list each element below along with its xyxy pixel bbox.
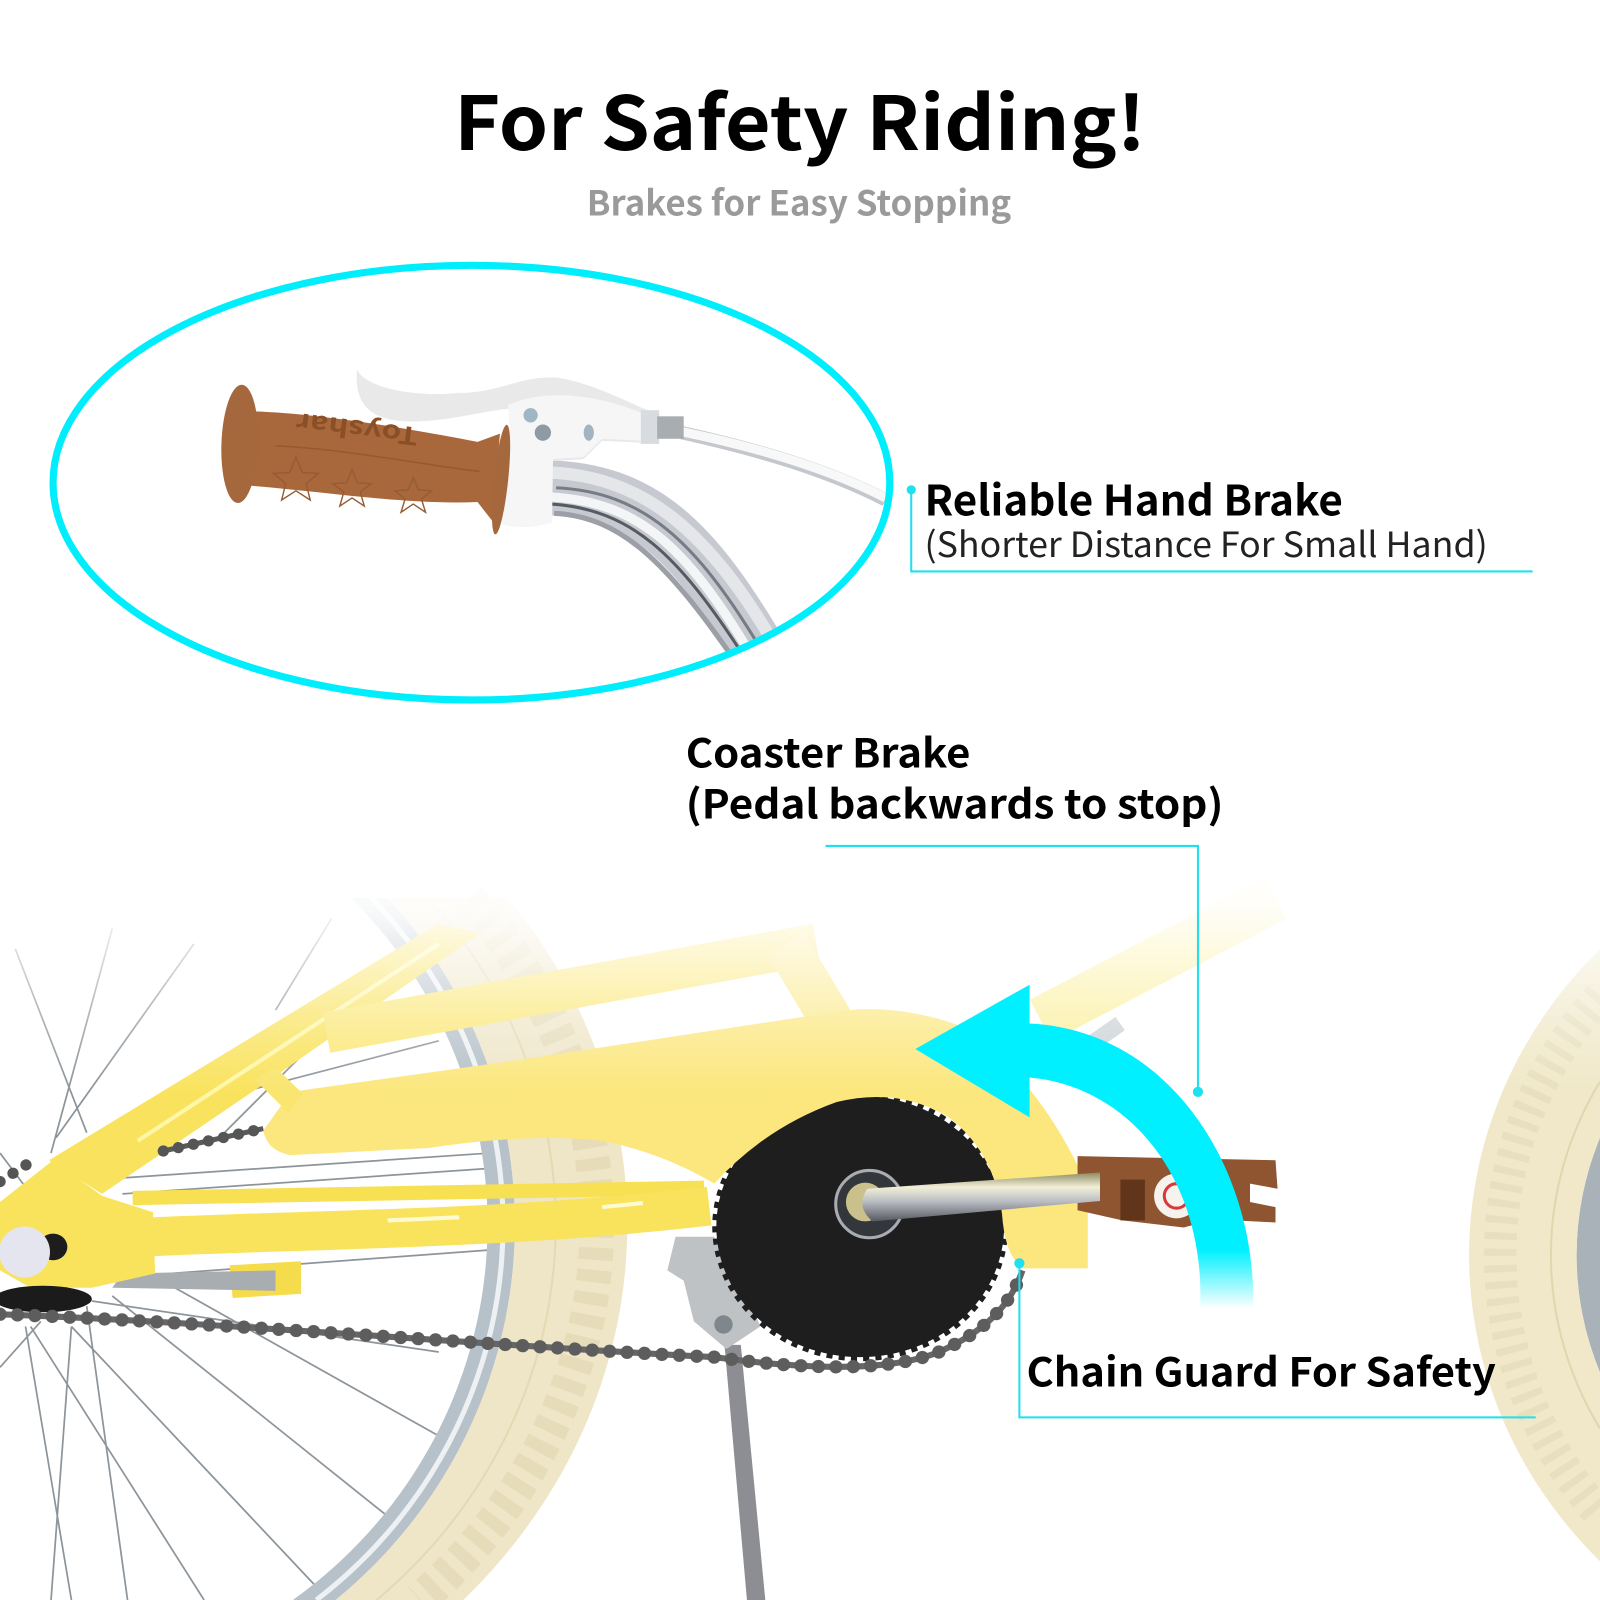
rear sprocket xyxy=(0,1286,92,1312)
callout: chain guard xyxy=(1014,1258,1536,1417)
subtitle: Brakes for Easy Stopping xyxy=(587,175,1012,225)
white clamp xyxy=(501,424,553,527)
axle nut and cap xyxy=(0,1227,67,1278)
chainring xyxy=(715,1095,1005,1358)
right wheel xyxy=(1469,949,1600,1561)
rear wheel spokes xyxy=(0,918,490,1600)
callout: reliable hand brake: (Shorter Distance For Small Hand) xyxy=(924,517,1488,567)
seat-tube sticker xyxy=(1053,1017,1125,1074)
title: For Safety Riding! xyxy=(454,65,1146,172)
brake lever xyxy=(357,369,684,461)
seat stay xyxy=(49,923,480,1194)
guard bracket xyxy=(255,1067,303,1112)
panel: hand brake close-up xyxy=(53,265,890,700)
callout: reliable hand brake xyxy=(907,467,1533,571)
cyan oval frame xyxy=(53,265,890,700)
top fade overlay xyxy=(0,867,1600,1092)
callout: coaster brake: (Pedal backwards to stop) xyxy=(686,773,1223,830)
callout: coaster brake xyxy=(686,722,1223,1097)
handlebar xyxy=(546,472,770,653)
rear wheel rim and tyre xyxy=(293,898,627,1600)
callout: chain guard: Chain Guard For Safety xyxy=(1027,1342,1496,1399)
frame tubes xyxy=(138,898,1276,1141)
callout: coaster brake: Coaster Brake xyxy=(686,722,970,779)
axle bracket xyxy=(230,1261,301,1298)
kickstand xyxy=(667,1237,765,1600)
brake cable xyxy=(682,432,886,500)
curved cyan arrow xyxy=(915,985,1253,1308)
rubber grip xyxy=(219,384,514,535)
panel: bike rear close-up xyxy=(0,867,1600,1600)
pedal xyxy=(1078,1156,1278,1228)
callout: reliable hand brake: Reliable Hand Brake xyxy=(924,467,1343,528)
lower chain xyxy=(0,1270,1022,1367)
upper chain xyxy=(0,1129,263,1182)
grip stars xyxy=(273,457,432,512)
chain stays xyxy=(133,1188,709,1237)
chain guard xyxy=(263,1009,1088,1268)
crank arm xyxy=(836,1170,1100,1238)
grip lettering: Toyshar xyxy=(294,405,420,455)
dropout plate xyxy=(0,1160,155,1288)
